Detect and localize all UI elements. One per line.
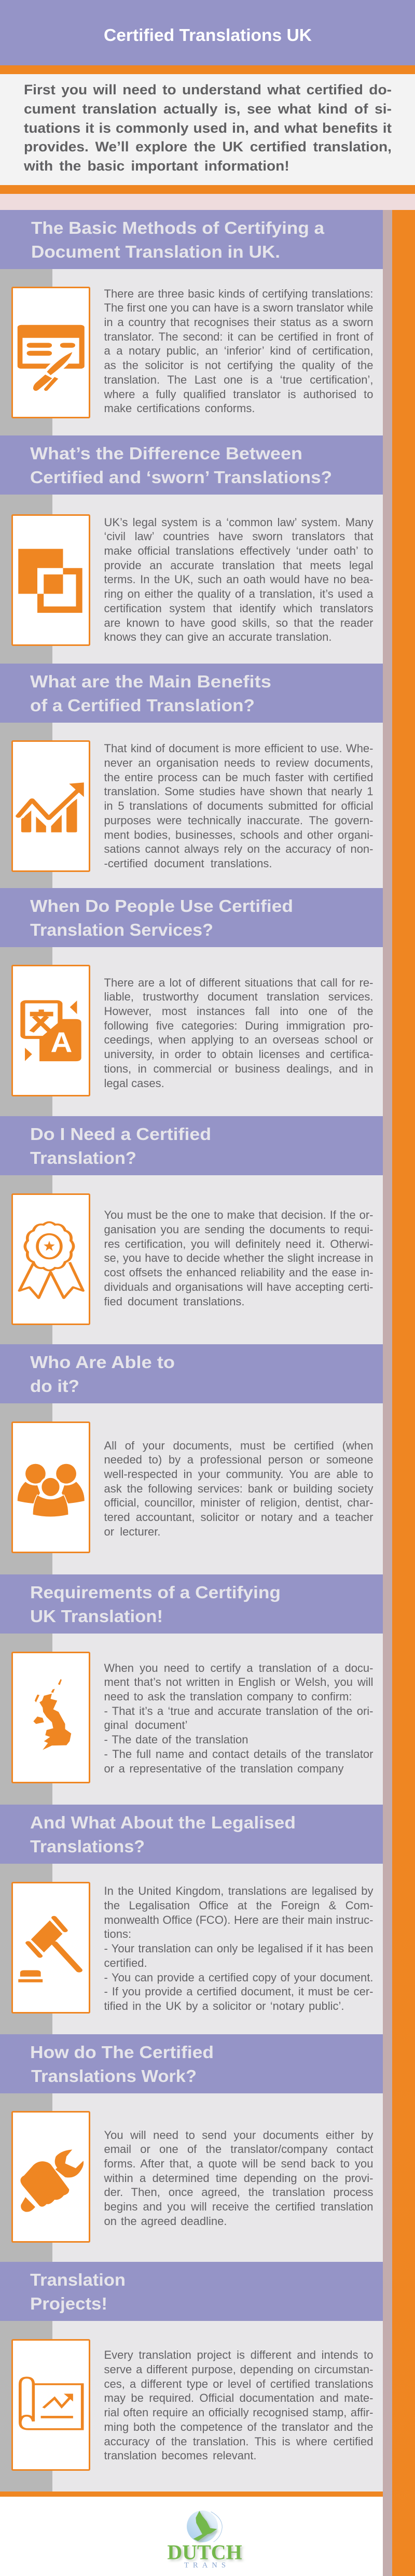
body text: a a notary public, an ‘inferior’ kind of certification, (104, 344, 374, 357)
logo: Dutch Trans (167, 2510, 244, 2569)
body text: as the solicitor is not certifying the quality of the (104, 359, 374, 372)
body text: in a country that recognises their status as a sworn (104, 316, 374, 329)
heading: How do The Certified (30, 2043, 214, 2062)
body text: der. Then, once agreed, the translation process (104, 2186, 374, 2199)
body text: email or one of the translator/company contact (104, 2143, 374, 2156)
panel: requirements (0, 1574, 383, 1805)
body text: following five categories: During immigration pro- (104, 1019, 374, 1032)
body text: - You can provide a certified copy of your document. (104, 1971, 374, 1983)
heading (0, 1574, 383, 1634)
heading (0, 1805, 383, 1864)
body text: in 5 translations of documents submitted for official (104, 799, 374, 812)
intro panel (0, 65, 415, 210)
body text: are known to have good skills, so that the reader (104, 616, 374, 629)
body text: There are a lot of different situations that call for re- (104, 976, 374, 989)
heading: Translation (30, 2271, 126, 2290)
body text: purposes were technically inaccurate. The govern- (104, 814, 374, 827)
heading (0, 1344, 383, 1403)
body text: liable, trustworthy document translation services. (104, 990, 374, 1003)
body text: make certifications conforms. (104, 402, 255, 415)
icon: document and pen (11, 287, 90, 418)
body text: In the United Kingdom, translations are legalised by (104, 1884, 374, 1897)
heading: Translations? (30, 1837, 145, 1856)
body text: - The date of the translation (104, 1733, 248, 1746)
right side stripes (383, 210, 415, 2576)
body text: the Legalisation Office at the Foreign & Com- (104, 1899, 374, 1912)
body text: serve a different purpose, depending on circumstan- (104, 2363, 374, 2376)
heading: What’s the Difference Between (30, 444, 302, 463)
heading: Certified and ‘sworn’ Translations? (30, 468, 332, 487)
body text: ganisation you are sending the documents to requi- (104, 1223, 374, 1236)
body text (104, 1439, 374, 1538)
body text: or a representative of the translation company (104, 1762, 343, 1775)
body text: ming both the competence of the translator and the (104, 2420, 374, 2433)
body text: ceedings, when applying to an overseas school or (104, 1033, 374, 1046)
body text: cost offsets the enhanced reliability and the ease in- (104, 1266, 374, 1279)
icon: scroll with chart (11, 2339, 90, 2471)
body text: forms. After that, a quote will be send back to you (104, 2157, 374, 2170)
body text: - The full name and contact details of the translator (104, 1748, 374, 1761)
body text: ment bodies, businesses, schools and other organi- (104, 828, 374, 841)
body text: monwealth Office (FCO). Here are their main instruc- (104, 1913, 374, 1926)
body text: ces, a different type or level of certified translations (104, 2377, 374, 2390)
footer orange rule (0, 2491, 383, 2497)
heading: Requirements of a Certifying (30, 1583, 281, 1602)
body text: provide an accurate translation that meets legal (104, 559, 374, 572)
logo: Dutch Trans: DUTCH (167, 2541, 242, 2564)
title band: Certified Translations UK (104, 25, 312, 45)
body text: certification system that identify which translators (104, 602, 374, 615)
heading: Do I Need a Certified (30, 1125, 211, 1144)
heading (0, 435, 383, 495)
body text: -certified document translations. (104, 857, 272, 870)
body text (104, 2348, 374, 2462)
panel: when people use (0, 888, 383, 1116)
body text: That kind of document is more efficient to use. Whe- (104, 742, 374, 755)
body text: translation becomes relevant. (104, 2449, 256, 2462)
body text: - Your translation can only be legalised if it has been (104, 1942, 374, 1955)
icon: award rosette (11, 1193, 90, 1325)
intro text: with the basic important information! (24, 158, 289, 174)
body text: translation. Some studies have shown that nearly 1 (104, 785, 374, 798)
body text (104, 1208, 374, 1307)
body text: However, most instances fall into one of the (104, 1005, 374, 1018)
panel: how it works (0, 2034, 383, 2262)
heading (0, 210, 383, 269)
icon: rising chart (11, 740, 90, 872)
panel: basic methods (0, 210, 383, 435)
body text: may be required. Official documentation and mate- (104, 2391, 374, 2404)
heading (0, 1116, 383, 1175)
body text (104, 1661, 374, 1775)
body text: There are three basic kinds of certifying translations: (104, 287, 374, 300)
heading: Translation Services? (30, 921, 213, 940)
body text: translator. The second: it can be certified in front of (104, 330, 374, 343)
heading (0, 2034, 383, 2093)
intro text (24, 82, 392, 174)
heading: What are the Main Benefits (30, 672, 271, 692)
heading (0, 664, 383, 723)
body text: ask the following services: bank or building society (104, 1482, 374, 1495)
body text: knows they can give an accurate translation. (104, 630, 332, 643)
body text: se, you have to decide whether the slight increase in (104, 1251, 374, 1264)
body text (104, 742, 374, 870)
body text (104, 976, 374, 1090)
body text: fied document translations. (104, 1295, 245, 1307)
body text: university, in order to obtain licenses and certifica- (104, 1048, 374, 1061)
body text: well-respected in your community. You are able to (104, 1468, 374, 1481)
panel: main benefits (0, 664, 383, 888)
body text: You must be the one to make that decision. If the or- (104, 1208, 374, 1221)
heading: Translations Work? (31, 2067, 197, 2086)
body text: rial often require an officially recognised stamp, affir- (104, 2406, 374, 2419)
logo: Dutch Trans: DUTCH (169, 2542, 244, 2565)
body text: certified. (104, 1956, 147, 1969)
body text (104, 287, 374, 415)
body text: res certification, you will definitely need it. Otherwi- (104, 1237, 374, 1250)
body text: official, councillor, minister of religion, dentist, char- (104, 1496, 374, 1509)
body text: - If you provide a certified document, it must be cer- (104, 1985, 374, 1998)
body text: ‘civil law’ countries have sworn translators that (104, 530, 374, 543)
heading: Document Translation in UK. (31, 243, 280, 262)
icon: translate (11, 965, 90, 1096)
body text: on the agreed deadline. (104, 2215, 227, 2228)
icon: hand with wrench (11, 2111, 90, 2243)
body text: UK’s legal system is a ‘common law’ system. Many (104, 515, 374, 529)
body text (104, 515, 374, 643)
body text: terms. In the UK, such an oath would have no bea- (104, 573, 374, 586)
icon: overlapping squares (11, 514, 90, 646)
panel: translation projects (0, 2262, 383, 2491)
heading: Who Are Able to (30, 1353, 175, 1372)
heading: When Do People Use Certified (30, 897, 293, 916)
body text: never an organisation needs to review documents, (104, 756, 374, 769)
body text: - That it’s a ‘true and accurate translation of the ori- (104, 1705, 374, 1718)
heading: of a Certified Translation? (30, 696, 255, 715)
body text: legal cases. (104, 1077, 164, 1090)
intro text: tuations it is commonly used in, and what benefits it (24, 120, 392, 136)
body text: Every translation project is different and intends to (104, 2348, 374, 2361)
panel: who is able (0, 1344, 383, 1574)
panel: certified vs sworn (0, 435, 383, 664)
icon: gavel (11, 1882, 90, 2014)
heading: The Basic Methods of Certifying a (31, 219, 324, 238)
body text: the entire process can be much faster with certified (104, 771, 374, 784)
intro text: cument translation actually is, see what kind of si- (24, 101, 392, 117)
icon: UK map (11, 1652, 90, 1783)
heading (0, 888, 383, 947)
body text: within a determined time depending on the provi- (104, 2172, 374, 2185)
logo: Dutch Trans: TRANS (184, 2561, 226, 2569)
body text: need to ask the translation company to confirm: (104, 1690, 352, 1703)
body text: tered accountant, solicitor or notary and a teacher (104, 1511, 374, 1524)
body text: dividuals and organisations will have accepting certi- (104, 1280, 374, 1293)
panel: do I need (0, 1116, 383, 1344)
heading: do it? (30, 1377, 79, 1396)
body text: ment that’s not written in English or Welsh, you will (104, 1676, 374, 1688)
body text: When you need to certify a translation of a docu- (104, 1661, 374, 1674)
body text: make official translations effectively ‘under oath’ to (104, 544, 374, 557)
body text: tions: (104, 1927, 131, 1940)
body text: The first one you can have is a sworn translator while (104, 301, 374, 314)
body text: accuracy of the translation. This is where certified (104, 2434, 374, 2448)
heading (0, 2262, 383, 2321)
body text: tions, in commercial or business dealings, and in (104, 1062, 374, 1075)
body text: All of your documents, must be certified (when (104, 1439, 374, 1452)
panel: legalised translations (0, 1805, 383, 2034)
body text: translation. The Last one is a ‘true certification’, (104, 373, 374, 386)
body text: sations cannot always rely on the accuracy of non- (104, 842, 374, 855)
body text: where a fully qualified translator is authorised to (104, 388, 374, 401)
intro text: First you will need to understand what certified do- (24, 82, 392, 97)
icon: group of people (11, 1421, 90, 1553)
title band (0, 0, 415, 65)
body text (104, 1884, 374, 2012)
body text: ginal document’ (104, 1719, 188, 1732)
intro text: provides. We’ll explore the UK certified translation, (24, 139, 392, 154)
body text: or lecturer. (104, 1525, 161, 1538)
body text: needed to) by a professional person or someone (104, 1453, 374, 1466)
icon: translate: A (50, 1026, 72, 1058)
heading: UK Translation! (30, 1607, 163, 1626)
body text: begins and you will receive the certified translation (104, 2200, 374, 2213)
heading: And What About the Legalised (30, 1813, 296, 1833)
body text (104, 2129, 374, 2228)
body text: You will need to send your documents either by (104, 2129, 374, 2141)
heading: Translation? (30, 1149, 136, 1168)
heading: Projects! (30, 2295, 107, 2314)
body text: ring on either the quality of a translation, it’s used a (104, 587, 374, 600)
body text: tified in the UK by a solicitor or ‘notary public’. (104, 2000, 344, 2012)
